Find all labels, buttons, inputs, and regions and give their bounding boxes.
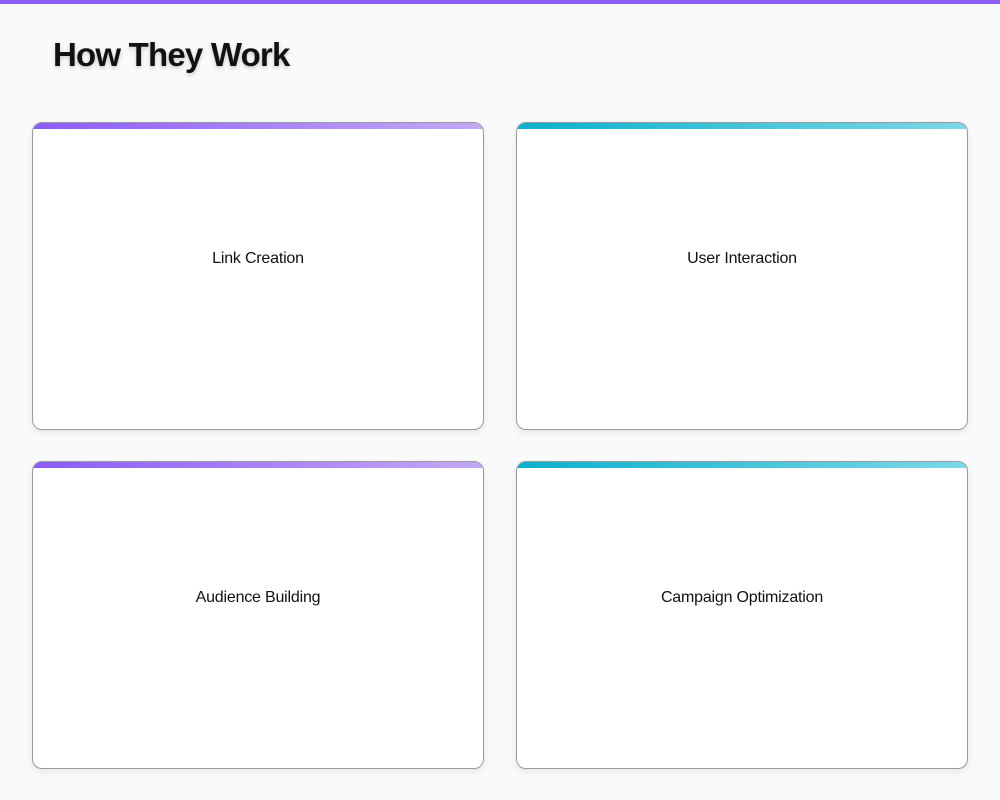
- panel: link creation: [32, 122, 484, 430]
- panel: audience building: [32, 461, 484, 769]
- title: How They Work: [53, 36, 290, 73]
- panel: link creation: Link Creation: [212, 250, 304, 267]
- panel: campaign optimization: [516, 461, 968, 769]
- panel: campaign optimization: Campaign Optimization: [661, 589, 823, 606]
- panel: user interaction: [516, 122, 968, 430]
- panel: user interaction: User Interaction: [687, 250, 797, 267]
- panel: audience building: Audience Building: [196, 589, 320, 606]
